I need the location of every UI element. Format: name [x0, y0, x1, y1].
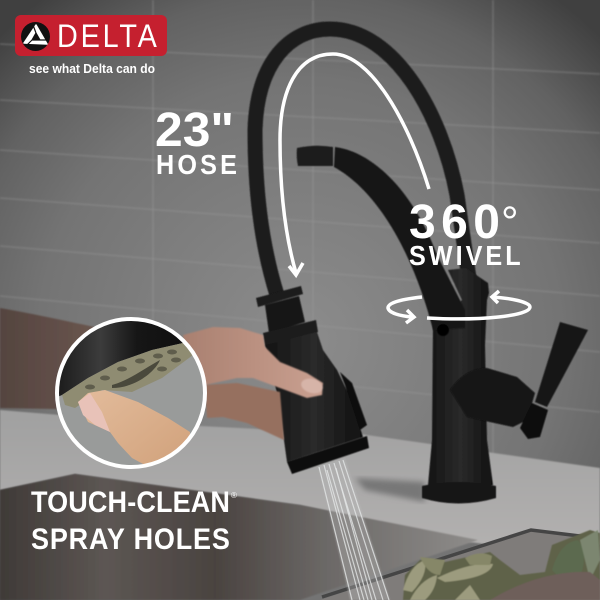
countertop	[0, 410, 600, 560]
logo: Delta	[15, 15, 167, 76]
spout	[297, 146, 465, 336]
artichokes	[403, 530, 600, 600]
callout: touch-clean spray holes	[31, 486, 237, 556]
hose length arrow	[280, 54, 429, 275]
spray head	[256, 286, 369, 474]
logo: Delta: see what Delta can do	[29, 62, 155, 76]
callout: 23 inch hose	[155, 104, 237, 180]
callout: 23 inch hose: HOSE	[156, 149, 237, 180]
callout: touch-clean spray holes: ®	[231, 491, 237, 500]
callout: 360 swivel	[409, 196, 521, 271]
logo: Delta: DELTA	[57, 19, 158, 54]
forearm	[0, 308, 110, 410]
callout: touch-clean spray holes: SPRAY HOLES	[31, 523, 230, 556]
swivel arrow	[388, 291, 530, 323]
callout: 23 inch hose: 23"	[155, 104, 234, 157]
handle	[450, 322, 588, 439]
callout: 360 swivel: 360	[409, 196, 500, 249]
callout: 360 swivel: °	[501, 198, 519, 247]
hand	[183, 327, 324, 440]
callout: touch-clean spray holes: TOUCH-CLEAN	[31, 486, 230, 519]
callout: 360 swivel: SWIVEL	[409, 240, 521, 271]
sink basin	[0, 474, 478, 600]
inset circle: spray holes	[55, 317, 207, 469]
hose	[255, 29, 470, 295]
right sink	[320, 530, 600, 600]
counter shadow	[355, 478, 425, 502]
faucet body	[422, 268, 496, 504]
water stream	[318, 458, 390, 600]
